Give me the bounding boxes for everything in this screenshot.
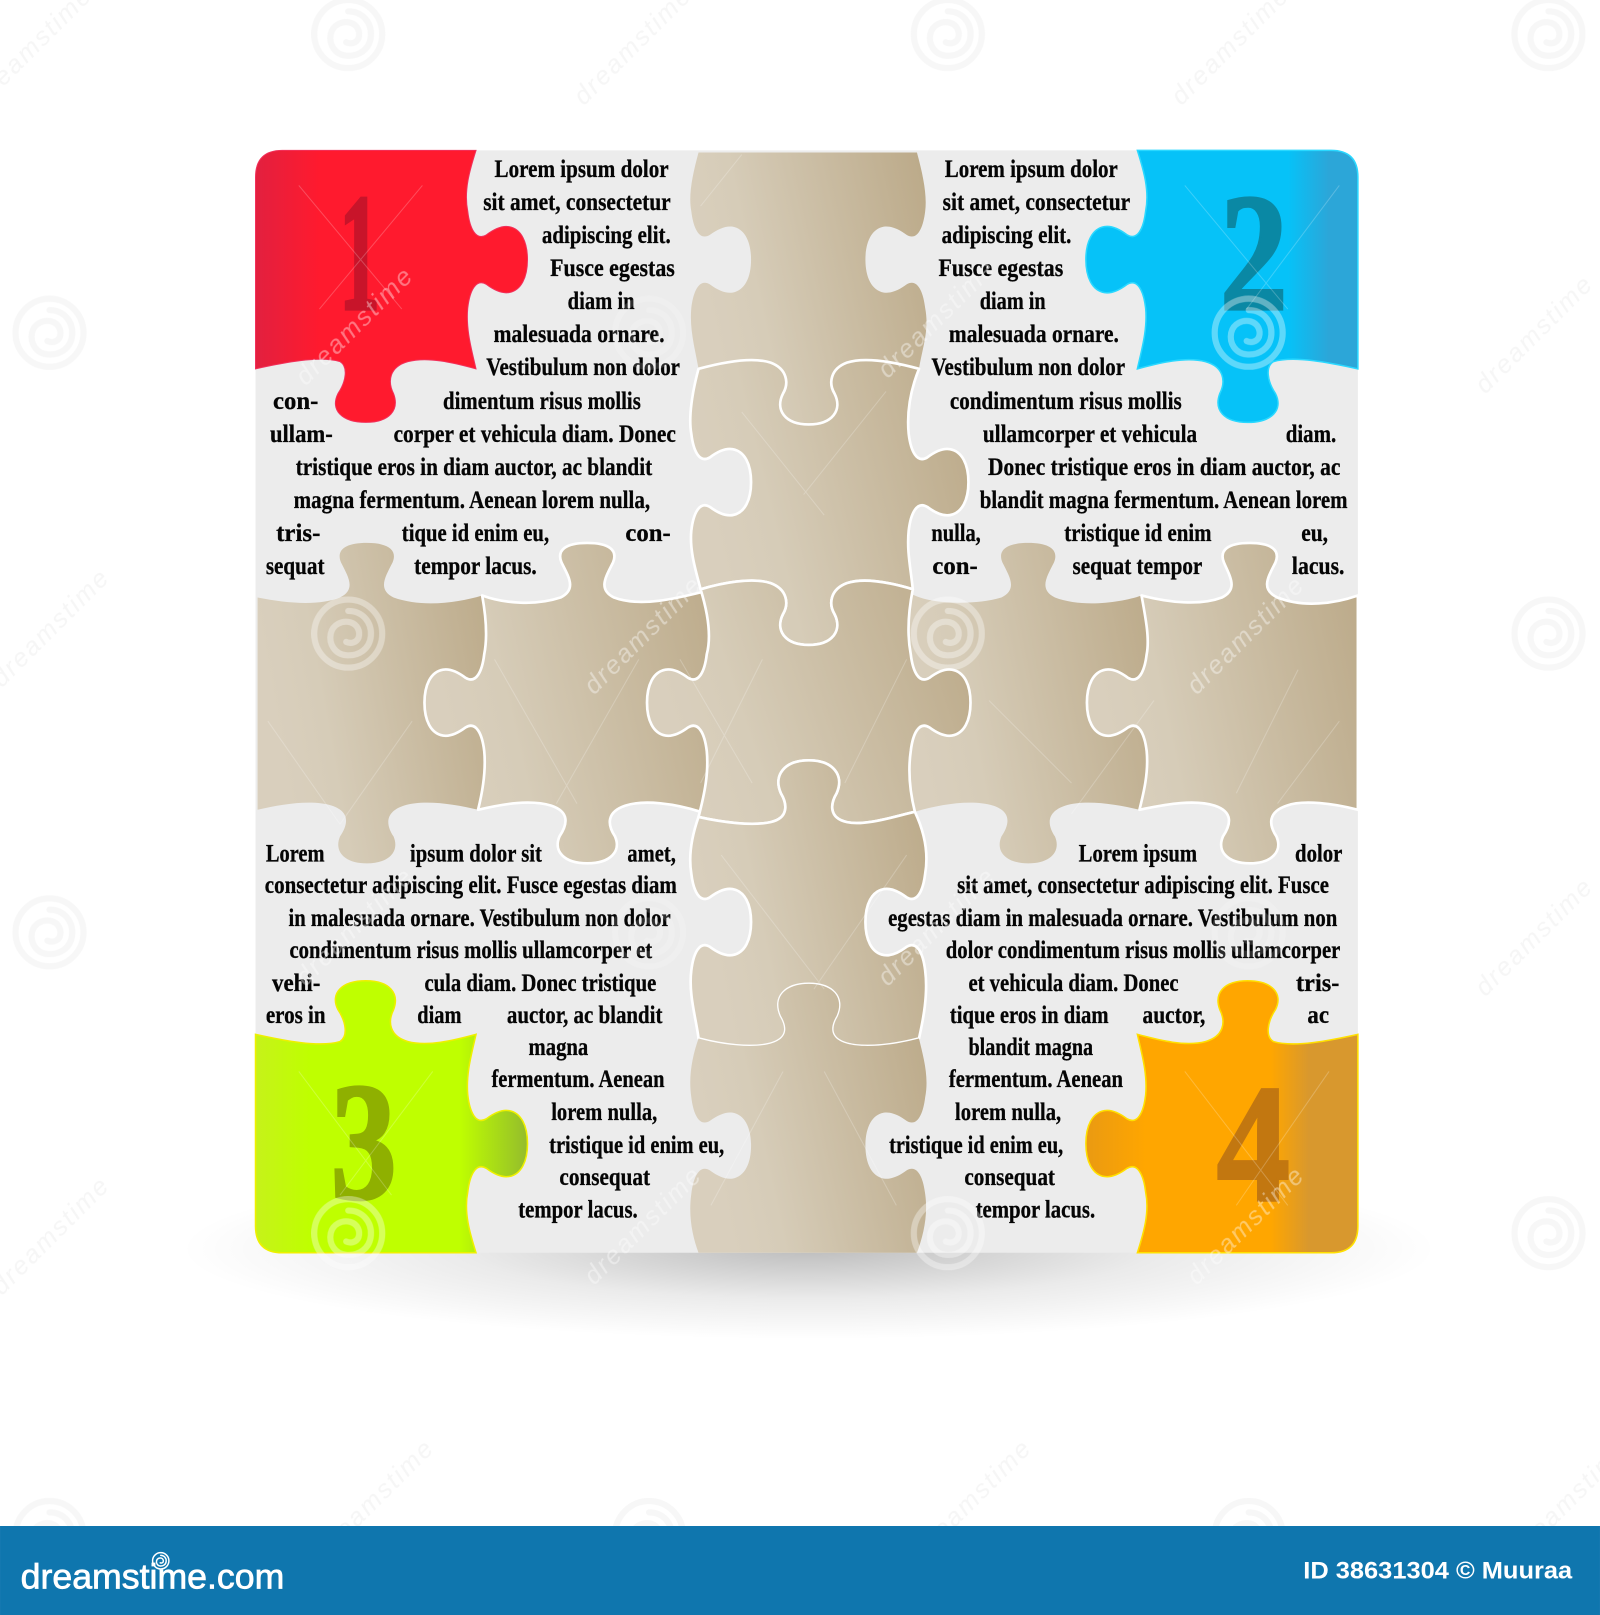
text block: bottom right: fermentum. Aenean [949, 1064, 1123, 1093]
text block: bottom left: vehi- [272, 968, 320, 997]
text block: top left: Fusce egestas [550, 253, 675, 282]
text block: bottom left: magna [529, 1032, 588, 1061]
text block: top right: Vestibulum non dolor [931, 352, 1125, 381]
piece: red corner with number 1 [256, 150, 528, 422]
text block: top right: sequat tempor [1072, 551, 1202, 580]
text block: top left: con- [625, 518, 671, 547]
watermark text on board: dreamstime [1181, 1161, 1311, 1290]
text block: top right: con- [932, 551, 978, 580]
text block: top left: adipiscing elit. [542, 220, 671, 249]
text block: top left: tique id enim eu, [402, 518, 549, 547]
text block: top left: sequat [266, 551, 325, 580]
text block: bottom left: in malesuada ornare. Vestibulum non dolor [288, 903, 671, 932]
watermark text on board: dreamstime [290, 261, 420, 391]
piece: fourth row centre [690, 760, 926, 1046]
board drop shadow [180, 1158, 1437, 1339]
text block: bottom right: auctor, [1143, 1000, 1205, 1029]
text block: top right: Donec tristique eros in diam auctor, ac [988, 452, 1340, 481]
text block: top right: ullamcorper et vehicula [983, 419, 1197, 448]
piece: orange corner with number 4: 4 [1217, 1051, 1290, 1237]
piece: middle row column 2 [424, 543, 721, 863]
text block: top left: diam in [568, 286, 635, 315]
text block: bottom right: tempor lacus. [976, 1195, 1095, 1224]
piece: blue corner with number 2 [1086, 150, 1358, 422]
piece: centre [647, 581, 971, 824]
text block: top right: nulla, [931, 518, 981, 547]
piece: top centre [690, 152, 927, 424]
piece: green corner with number 3 [256, 981, 528, 1253]
text block: top right [931, 154, 1348, 580]
text block: top left: ullam- [270, 419, 333, 448]
text block: bottom right: tristique id enim eu, [889, 1130, 1063, 1159]
text block: bottom left: auctor, ac blandit [507, 1000, 663, 1029]
text block: bottom right: tris- [1296, 968, 1339, 997]
tan puzzle pieces [258, 152, 1358, 1253]
text block: bottom left: consectetur adipiscing elit. Fusce egestas diam [265, 870, 677, 899]
text block: top right: blandit magna fermentum. Aenean lorem [980, 485, 1348, 514]
text block: bottom left: Lorem [266, 838, 325, 867]
text block: bottom left: tristique id enim eu, [549, 1130, 724, 1159]
watermark text on board: dreamstime [872, 254, 1002, 384]
text block: bottom right: blandit magna [968, 1032, 1093, 1061]
text block: bottom right: ac [1307, 1000, 1329, 1029]
faint watermark cross lines on board [268, 155, 1339, 1205]
text block: top left: malesuada ornare. [494, 319, 665, 348]
footer logo spiral [153, 1553, 169, 1569]
text block: bottom right: et vehicula diam. Donec [968, 968, 1179, 997]
text block: top right: Fusce egestas [939, 253, 1063, 282]
text block: top right: Lorem ipsum dolor [945, 154, 1118, 183]
footer bar [0, 1526, 1600, 1615]
text block: bottom right: tique eros in diam [950, 1000, 1109, 1029]
watermark text on white background: dreamstime [311, 1434, 440, 1563]
watermark text on board: dreamstime [579, 570, 708, 700]
piece: second row centre [690, 360, 968, 645]
text block: bottom left: diam [417, 1000, 462, 1029]
text block: top right: lacus. [1292, 551, 1344, 580]
text block: top right: tristique id enim [1064, 518, 1212, 547]
text block: bottom left: fermentum. Aenean [491, 1064, 665, 1093]
piece: bottom centre [690, 984, 927, 1253]
text block: bottom right: egestas diam in malesuada ornare. Vestibulum non [888, 903, 1337, 932]
text block: top right: condimentum risus mollis [950, 386, 1182, 415]
text block: top right: malesuada ornare. [949, 319, 1119, 348]
text block: bottom left: lorem nulla, [551, 1097, 657, 1126]
text block: top left: con- [273, 386, 318, 415]
text block: top left: sit amet, consectetur [483, 187, 671, 216]
text block: top left: tempor lacus. [414, 551, 537, 580]
footer logo text: dreamstime.com [21, 1558, 284, 1597]
piece: blue corner with number 2: 2 [1220, 160, 1288, 346]
text block: top left: tristique eros in diam auctor, ac blandit [296, 452, 653, 481]
text block: bottom right: dolor condimentum risus mollis ullamcorper [946, 935, 1340, 964]
text block: bottom right: Lorem ipsum [1079, 838, 1198, 867]
text block: bottom left: consequat [559, 1162, 650, 1191]
watermark text on board: dreamstime [872, 862, 1002, 991]
text block: bottom right [888, 838, 1342, 1224]
text block: top right: eu, [1301, 518, 1328, 547]
text block: top left: magna fermentum. Aenean lorem nulla, [294, 485, 650, 514]
text block: bottom left: condimentum risus mollis ullamcorper et [290, 935, 652, 964]
watermark text on white background: dreamstime [1470, 872, 1599, 1002]
text block: bottom left: eros in [266, 1000, 326, 1029]
watermark text on board: dreamstime [579, 1161, 708, 1290]
text block: top right: diam in [980, 286, 1046, 315]
text block: top left: Vestibulum non dolor [486, 352, 680, 381]
piece: green corner with number 3: 3 [331, 1049, 397, 1235]
text block: top left: Lorem ipsum dolor [495, 154, 669, 183]
text block: top left: tris- [276, 518, 320, 547]
footer image id and credit: ID 38631304 © Muuraa [1303, 1558, 1573, 1584]
text block: bottom left [265, 838, 724, 1224]
text block: bottom right: consequat [964, 1162, 1055, 1191]
text block: top right: adipiscing elit. [942, 220, 1071, 249]
piece: red corner with number 1: 1 [339, 160, 380, 346]
text block: bottom right: lorem nulla, [955, 1097, 1061, 1126]
text block: bottom right: sit amet, consectetur adipiscing elit. Fusce [957, 870, 1329, 899]
watermark text on board: dreamstime [290, 862, 420, 991]
text block: top left [266, 154, 680, 580]
text block: bottom left: tempor lacus. [518, 1195, 638, 1224]
text block: top right: sit amet, consectetur [943, 187, 1130, 216]
watermark text on board [290, 254, 1311, 1290]
watermark text on white background: dreamstime [1470, 270, 1599, 399]
piece: middle row column 4 [896, 543, 1150, 863]
puzzle board base [256, 150, 1358, 1253]
text block: top left: dimentum risus mollis [443, 386, 641, 415]
text block: bottom left: ipsum dolor sit [410, 838, 542, 867]
piece: middle row column 1 [258, 543, 490, 863]
text block: bottom left: cula diam. Donec tristique [424, 968, 656, 997]
watermark spirals on board [314, 299, 1283, 1267]
text block: top left: corper et vehicula diam. Donec [394, 419, 676, 448]
text block: top right: diam. [1286, 419, 1336, 448]
piece: middle row column 5 [1087, 543, 1358, 863]
watermark text on board: dreamstime [1181, 570, 1311, 700]
text block: bottom left: amet, [627, 838, 676, 867]
piece: orange corner with number 4 [1086, 981, 1358, 1253]
text block: bottom right: dolor [1295, 838, 1342, 867]
watermark text on white background: dreamstime [908, 1434, 1038, 1563]
